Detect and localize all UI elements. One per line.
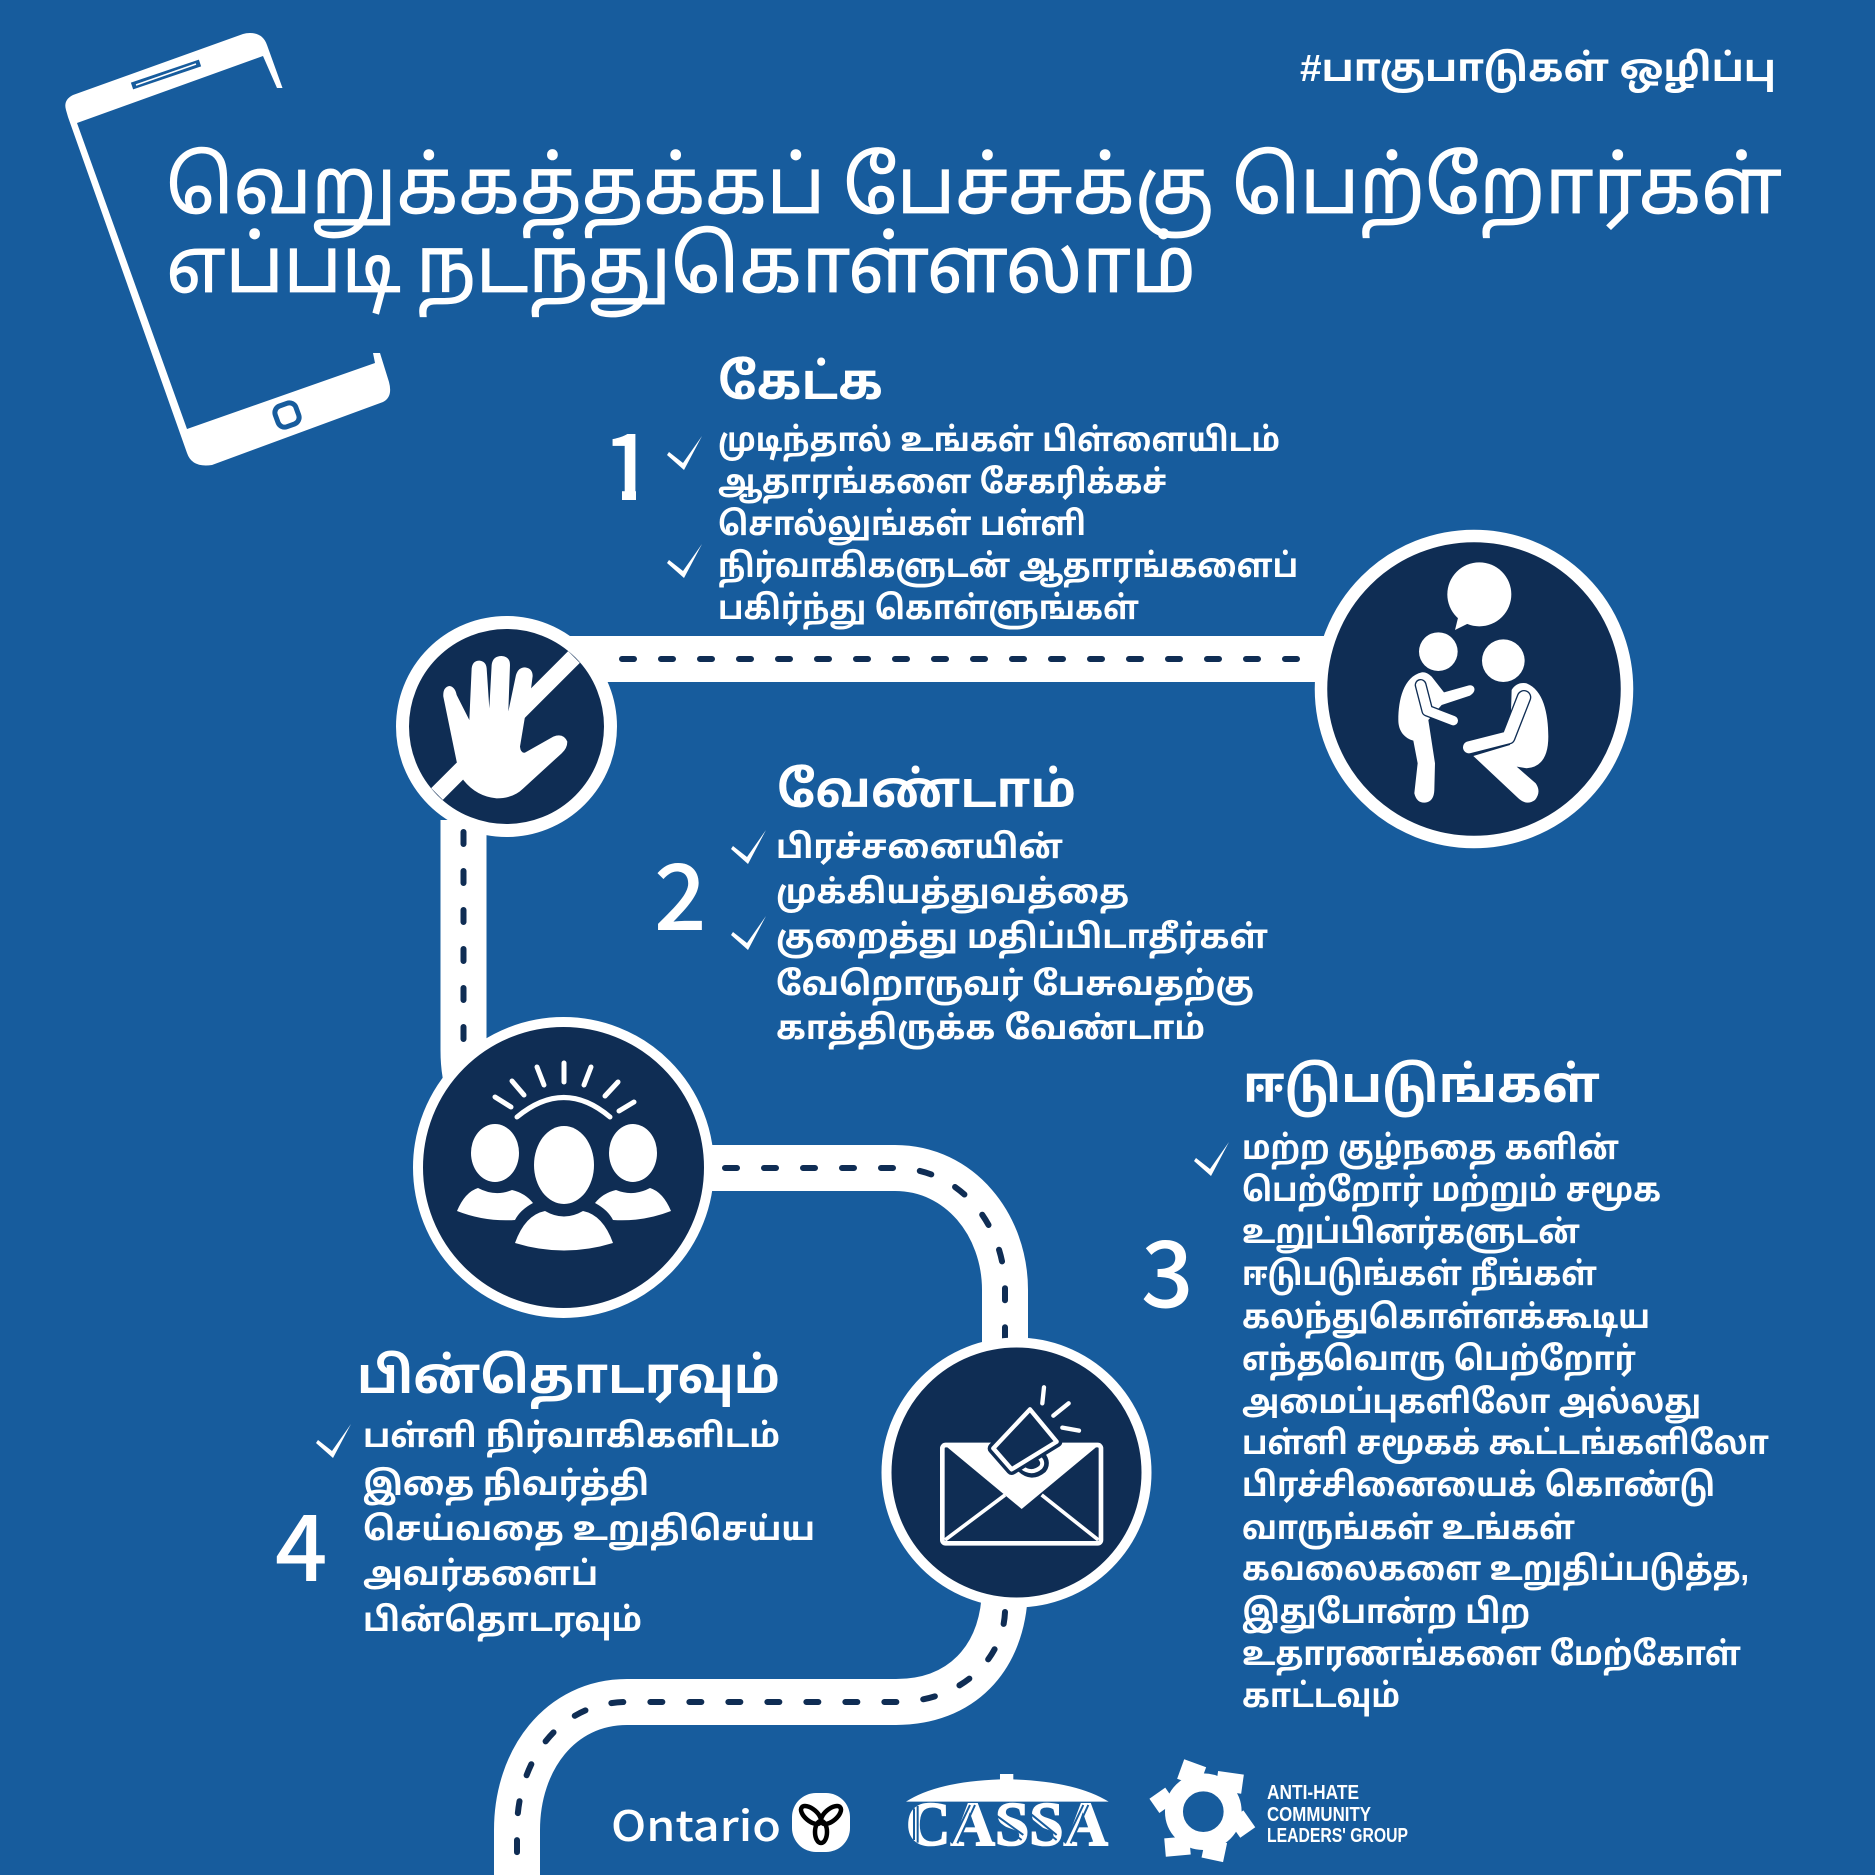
- step 2 text: முக்கியத்துவத்தை: [776, 873, 1129, 914]
- panel: step 1 listen: [602, 354, 1298, 630]
- hashtag: #பாகுபாடுகள் ஒழிப்பு: [1300, 48, 1776, 94]
- step 3 text: பிரச்சினையைக் கொண்டு: [1242, 1466, 1715, 1506]
- step 2 text: வேறொருவர் பேசுவதற்கு: [776, 965, 1254, 1006]
- logo wordmark: LEADERS' GROUP: [1267, 1825, 1408, 1847]
- step 3 text: பெற்றோர் மற்றும் சமூக: [1242, 1171, 1661, 1212]
- step 3 text: காட்டவும்: [1242, 1677, 1400, 1716]
- check mark: [667, 544, 702, 578]
- step 4 text: பின்தொடரவும்: [363, 1601, 642, 1641]
- step 2 text: குறைத்து மதிப்பிடாதீர்கள்: [776, 918, 1268, 959]
- step 1 text: [718, 421, 1298, 630]
- title: பெற்றோர்கள்: [1232, 142, 1782, 238]
- step 3 text: எந்தவொரு பெற்றோர்: [1242, 1340, 1636, 1381]
- step 3 text: ஈடுபடுங்கள் நீங்கள்: [1242, 1255, 1597, 1296]
- step 2 text: பிரச்சனையின்: [776, 828, 1063, 866]
- step 4 text: இதை நிவர்த்தி: [363, 1465, 649, 1506]
- step 1 text: முடிந்தால் உங்கள் பிள்ளையிடம்: [718, 421, 1280, 462]
- step 3 text: [1242, 1129, 1769, 1716]
- step 4 text: செய்வதை உறுதிசெய்ய: [363, 1510, 815, 1551]
- title: [166, 142, 1782, 317]
- check mark: [667, 436, 702, 470]
- heading: engage: ஈடுபடுங்கள்: [1243, 1057, 1600, 1118]
- panel: step 4 follow up: [275, 1348, 815, 1641]
- step 4 text: பள்ளி நிர்வாகிகளிடம்: [363, 1417, 780, 1458]
- step 3 text: உறுப்பினர்களுடன்: [1242, 1213, 1580, 1254]
- step 4 text: [363, 1417, 815, 1641]
- logo: anti-hate community leaders group: [1149, 1759, 1408, 1862]
- step 2 text: காத்திருக்க வேண்டாம்: [776, 1009, 1205, 1050]
- step 3 text: இதுபோன்ற பிற: [1242, 1593, 1530, 1634]
- step 3 text: கவலைகளை உறுதிப்படுத்த,: [1242, 1550, 1749, 1591]
- icon: parent and child talking: [1321, 536, 1627, 842]
- step 3 text: அமைப்புகளிலோ அல்லது: [1242, 1383, 1701, 1424]
- step 3 text: உதாரணங்களை மேற்கோள்: [1242, 1635, 1741, 1676]
- step number 4: 4: [275, 1475, 327, 1608]
- check mark: [1194, 1142, 1229, 1176]
- logo wordmark: ANTI-HATE: [1267, 1782, 1359, 1804]
- logo: Ontario: Ontario: [611, 1793, 781, 1854]
- title: வெறுக்கத்தக்கப்: [166, 142, 825, 238]
- logo: Ontario: [611, 1793, 850, 1854]
- step 2 text: [776, 828, 1268, 1050]
- step 3 text: பள்ளி சமூகக் கூட்டங்களிலோ: [1242, 1424, 1769, 1464]
- logo: CASSA: CASSA: [906, 1791, 1108, 1859]
- step 1 text: சொல்லுங்கள் பள்ளி: [718, 505, 1086, 546]
- title: நடந்துகொள்ளலாம்: [416, 221, 1196, 317]
- panel: step 2 don't: [654, 762, 1268, 1050]
- icon: envelope and megaphone: [886, 1342, 1146, 1602]
- icon: community group: [418, 1022, 709, 1313]
- step 1 text: ஆதாரங்களை சேகரிக்கச்: [718, 463, 1167, 504]
- step number 3: 3: [1141, 1201, 1193, 1334]
- heading: listen: கேட்க: [718, 354, 883, 410]
- icon: stop hand: [402, 622, 610, 830]
- check mark: [316, 1424, 351, 1458]
- check mark: [731, 916, 766, 950]
- heading: follow up: பின்தொடரவும்: [357, 1348, 780, 1409]
- step 3 text: மற்ற குழ்நதை களின்: [1242, 1129, 1619, 1170]
- step 3 text: கலந்துகொள்ளக்கூடிய: [1242, 1298, 1650, 1339]
- logo wordmark: [1267, 1782, 1408, 1847]
- check mark: [731, 830, 766, 864]
- step number 1: 1: [602, 394, 654, 527]
- title: பேச்சுக்கு: [843, 142, 1214, 238]
- panel: step 3 engage: [1141, 1057, 1769, 1716]
- step 1 text: பகிர்ந்து கொள்ளுங்கள்: [718, 589, 1139, 630]
- road path: [464, 659, 1330, 1875]
- icon: smartphone outline: [65, 33, 390, 466]
- title: எப்படி: [166, 221, 401, 315]
- step 3 text: வாருங்கள் உங்கள்: [1242, 1509, 1575, 1550]
- heading: don't: வேண்டாம்: [777, 762, 1076, 818]
- step number 2: 2: [654, 824, 706, 957]
- step 4 text: அவர்களைப்: [363, 1555, 598, 1593]
- icon: gear of people: [1149, 1759, 1255, 1862]
- logo wordmark: COMMUNITY: [1267, 1804, 1372, 1826]
- step 1 text: நிர்வாகிகளுடன் ஆதாரங்களைப்: [718, 547, 1298, 588]
